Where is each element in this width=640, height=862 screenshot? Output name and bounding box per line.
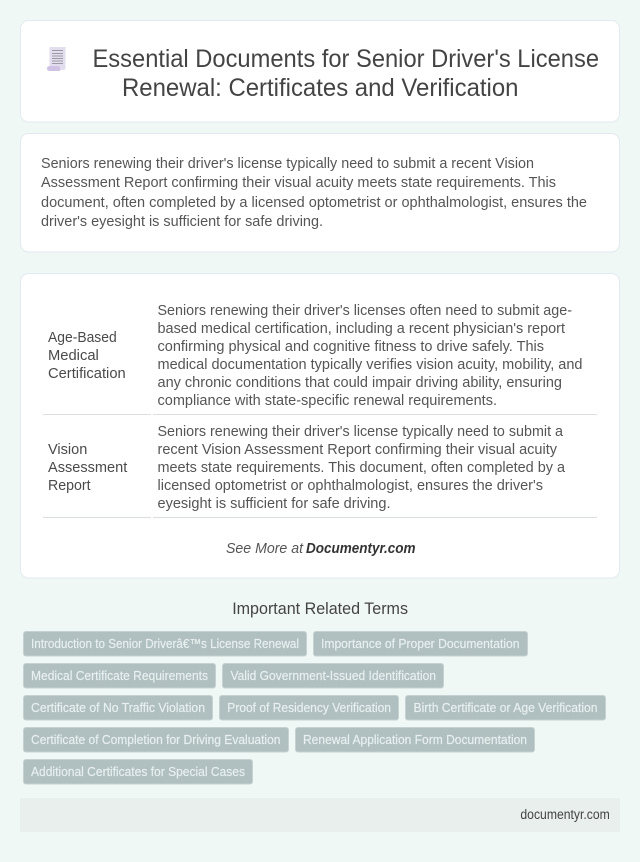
tag: Birth Certificate or Age Verification (414, 700, 598, 715)
row description: recent Vision Assessment Report confirming their visual acuity (158, 441, 557, 458)
see more link: Documentyr.com (306, 540, 416, 557)
row description: based medical certification, including a recent physician's report (158, 320, 566, 337)
tag (406, 696, 606, 720)
tag: Importance of Proper Documentation (321, 636, 520, 651)
footer bar (20, 798, 620, 832)
row description: compliance with state-specific renewal requirements. (158, 392, 497, 409)
row label: Medical (48, 347, 99, 364)
row label: Report (48, 477, 91, 494)
row description: licensed optometrist or ophthalmologist, ensures the driver's (158, 477, 543, 494)
footer bar: documentyr.com (520, 807, 610, 822)
tag (24, 728, 288, 752)
row description: confirming physical and cognitive fitness to drive safely. This (158, 338, 544, 355)
row description: eyesight is sufficient for safe driving. (158, 495, 390, 512)
see more link (226, 540, 416, 557)
panel: documents table card (20, 274, 620, 578)
tag (296, 728, 534, 752)
row label: Assessment (48, 459, 128, 476)
tag: Medical Certificate Requirements (31, 668, 208, 683)
tag (220, 696, 398, 720)
icon: document scroll (47, 47, 66, 71)
tag: Proof of Residency Verification (227, 700, 391, 715)
tag: Certificate of Completion for Driving Evaluation (31, 732, 280, 747)
panel: title card (20, 20, 620, 122)
row label: Vision (48, 441, 87, 458)
row label (48, 329, 126, 382)
row description (158, 302, 582, 409)
row description: medical documentation typically verifies vision acuity, mobility, and (158, 356, 582, 373)
tag (24, 632, 306, 656)
title: Essential Documents for Senior Driver's License (92, 45, 599, 73)
title (92, 45, 599, 102)
row description: Seniors renewing their driver's licenses often need to submit age- (158, 302, 572, 319)
summary paragraph: document, often completed by a licensed optometrist or ophthalmologist, ensures the (41, 194, 587, 211)
row label: Age-Based (48, 329, 117, 346)
row description: Seniors renewing their driver's license typically need to submit a (158, 423, 564, 440)
tag (24, 664, 216, 688)
row label (48, 441, 128, 494)
heading: important related terms: Important Related Terms (232, 599, 408, 618)
tag: Introduction to Senior Driverâ€™s License Renewal (31, 636, 299, 651)
tag (24, 760, 252, 784)
table row: age-based medical certification (48, 302, 582, 409)
tag (222, 664, 444, 688)
summary paragraph: Assessment Report confirming their visual acuity meets state requirements. This (41, 174, 556, 191)
row label: Certification (48, 365, 126, 382)
tag (314, 632, 528, 656)
tag (24, 696, 212, 720)
panel: summary card (20, 134, 620, 252)
table row: vision assessment report (48, 423, 566, 512)
row description: meets state requirements. This document, often completed by a (158, 459, 566, 476)
related terms tags (24, 632, 606, 784)
summary paragraph: Seniors renewing their driver's license typically need to submit a recent Vision (41, 155, 534, 172)
tag: Additional Certificates for Special Cases (31, 764, 245, 779)
row description (158, 423, 566, 512)
tag: Certificate of No Traffic Violation (31, 700, 205, 715)
summary paragraph (41, 155, 587, 230)
title: Renewal: Certificates and Verification (122, 74, 518, 102)
row description: any chronic conditions that could impair driving ability, ensuring (158, 374, 562, 391)
see more link: See More at (226, 540, 304, 557)
summary paragraph: driver's eyesight is sufficient for safe driving. (41, 213, 323, 230)
tag: Renewal Application Form Documentation (303, 732, 527, 747)
tag: Valid Government-Issued Identification (230, 668, 436, 683)
